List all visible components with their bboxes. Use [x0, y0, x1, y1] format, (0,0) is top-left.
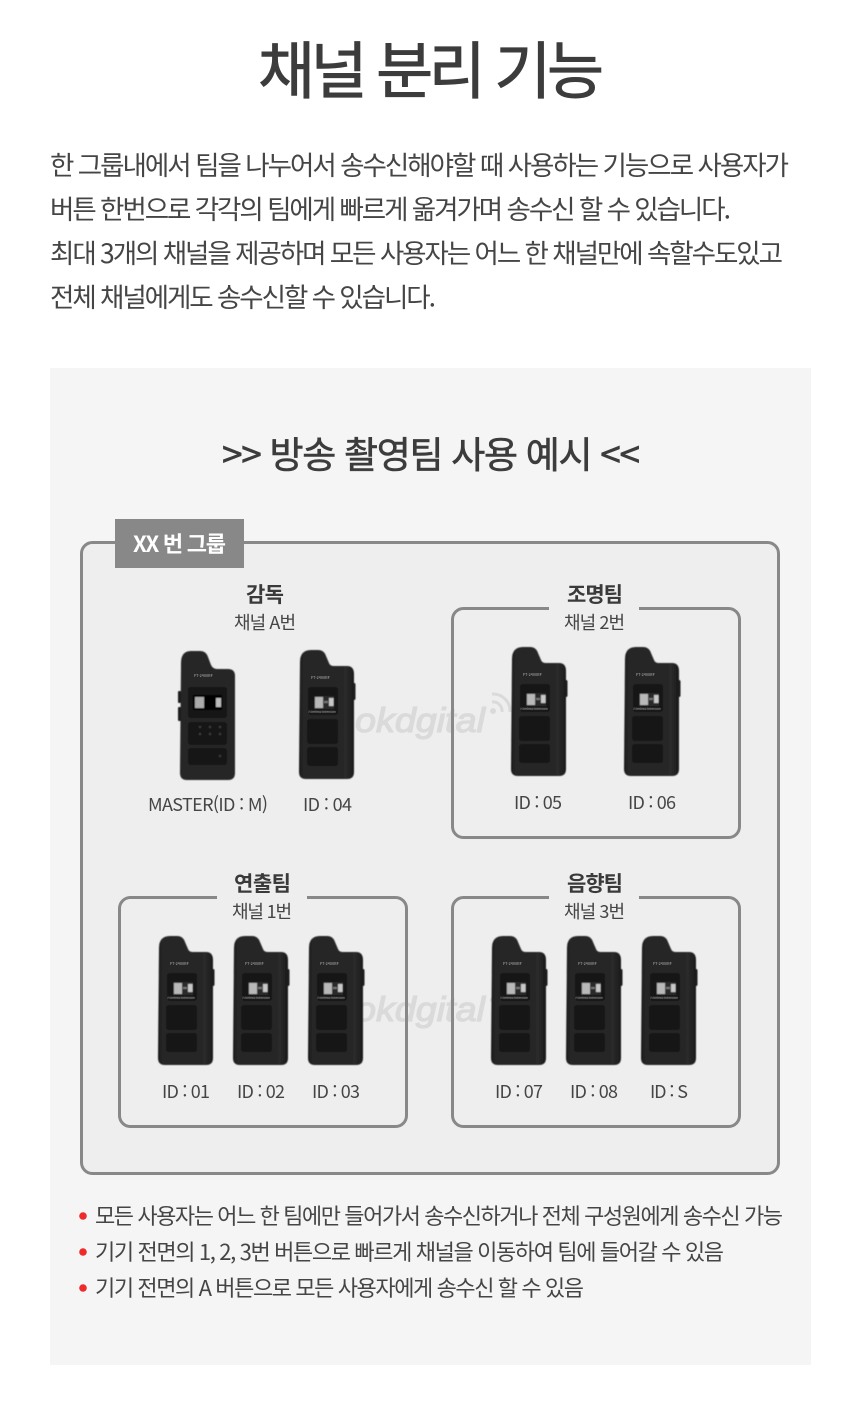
id label: 05: ID : 05: [514, 789, 562, 815]
channel label: 3: 채널 3번: [564, 898, 625, 924]
heading: lighting: 조명팀: [567, 579, 623, 609]
radio: S: Wireless Intercom: [650, 995, 678, 1000]
id label: S: ID : S: [650, 1078, 688, 1104]
radio: 01: FT-2400RF: [170, 962, 189, 967]
id label: 02: ID : 02: [237, 1078, 285, 1104]
box: sound: [452, 898, 740, 1126]
radio: 07: [491, 936, 548, 1065]
team: director: [148, 579, 356, 817]
group tag: [115, 519, 244, 568]
radio: 05: Wireless Intercom: [520, 706, 548, 711]
bullet 2: 기기 전면의 1, 2, 3번 버튼으로 빠르게 채널을 이동하여 팀에 들어갈 수 있음: [95, 1235, 724, 1267]
bullet 3: 기기 전면의 A 버튼으로 모든 사용자에게 송수신 할 수 있음: [95, 1271, 584, 1303]
heading: directing: 연출팀: [234, 868, 291, 898]
box: lighting: [452, 608, 740, 838]
watermark top: [355, 694, 510, 740]
radio: 07: FT-2400RF: [503, 962, 522, 967]
heading: example: >> 방송 촬영팀 사용 예시 <<: [222, 425, 640, 479]
radio: 06: FT-2400RF: [636, 673, 655, 678]
id label: 01: ID : 01: [162, 1078, 210, 1104]
radio: S: [641, 936, 698, 1065]
radio: 02: [233, 936, 290, 1065]
heading: director: 감독: [246, 579, 284, 609]
team: lighting: [452, 579, 740, 838]
id label: 03: ID : 03: [312, 1078, 360, 1104]
id label: 07: ID : 07: [495, 1078, 543, 1104]
text block: description: 최대 3개의 채널을 제공하며 모든 사용자는 어느 한 채널만에 속할수도있고: [50, 232, 783, 271]
radio: 01: Wireless Intercom: [167, 995, 195, 1000]
title: 채널 분리 기능: [258, 21, 604, 111]
radio: S: FT-2400RF: [653, 962, 672, 967]
channel label: 2: 채널 2번: [564, 609, 625, 635]
radio: 03: [308, 936, 364, 1065]
channel label: A: 채널 A번: [234, 609, 296, 635]
text block: description: 버튼 한번으로 각각의 팀에게 빠르게 옮겨가며 송수신 할 수 있습니다.: [50, 188, 731, 227]
label mask: [549, 600, 639, 620]
radio: 06: Wireless Intercom: [633, 706, 661, 711]
watermark bottom: [355, 983, 510, 1029]
radio: master: [178, 651, 235, 780]
radio: 06: [624, 647, 680, 776]
radio: 02: Wireless Intercom: [242, 995, 270, 1000]
text block: description: 한 그룹내에서 팀을 나누어서 송수신해야할 때 사용하는 기능으로 사용자가: [50, 144, 789, 183]
panel: group box: [82, 542, 778, 1174]
radio: 08: [566, 936, 622, 1065]
radio: 03: FT-2400RF: [320, 962, 339, 967]
radio: 04: [299, 650, 356, 779]
radio: 01: [158, 936, 214, 1065]
radio: 05: [511, 647, 568, 776]
radio: 05: FT-2400RF: [523, 673, 542, 678]
group tag: XX 번 그룹: [133, 527, 226, 559]
panel: usage example: [50, 368, 811, 1365]
watermark bottom: okdgital: [355, 991, 487, 1029]
team: sound: [452, 868, 740, 1126]
radio: 08: Wireless Intercom: [575, 995, 603, 1000]
team: directing: [120, 868, 406, 1126]
id label: 04: ID : 04: [303, 791, 352, 817]
id label: 06: ID : 06: [628, 789, 676, 815]
radio: 04: Wireless Intercom: [308, 709, 336, 714]
radio: master: FT-2400RF: [194, 674, 213, 679]
text block: description: [50, 144, 789, 315]
label mask: [549, 889, 639, 909]
bullet 1: 모든 사용자는 어느 한 팀에만 들어가서 송수신하거나 전체 구성원에게 송수신 가능: [95, 1199, 783, 1231]
radio: 07: Wireless Intercom: [500, 995, 528, 1000]
label mask: [217, 889, 307, 909]
channel label: 1: 채널 1번: [232, 898, 292, 924]
radio: 02: FT-2400RF: [245, 962, 264, 967]
bullet list: [79, 1199, 783, 1303]
heading: sound: 음향팀: [567, 868, 623, 898]
radio: 08: FT-2400RF: [578, 962, 597, 967]
box: directing: [120, 898, 406, 1126]
text block: description: 전체 채널에게도 송수신할 수 있습니다.: [50, 276, 436, 315]
radio: 03: Wireless Intercom: [317, 995, 345, 1000]
radio: 04: FT-2400RF: [311, 676, 330, 681]
watermark top: okdgital: [355, 702, 487, 740]
id label: 08: ID : 08: [570, 1078, 618, 1104]
id label: master: MASTER(ID : M): [148, 791, 268, 817]
